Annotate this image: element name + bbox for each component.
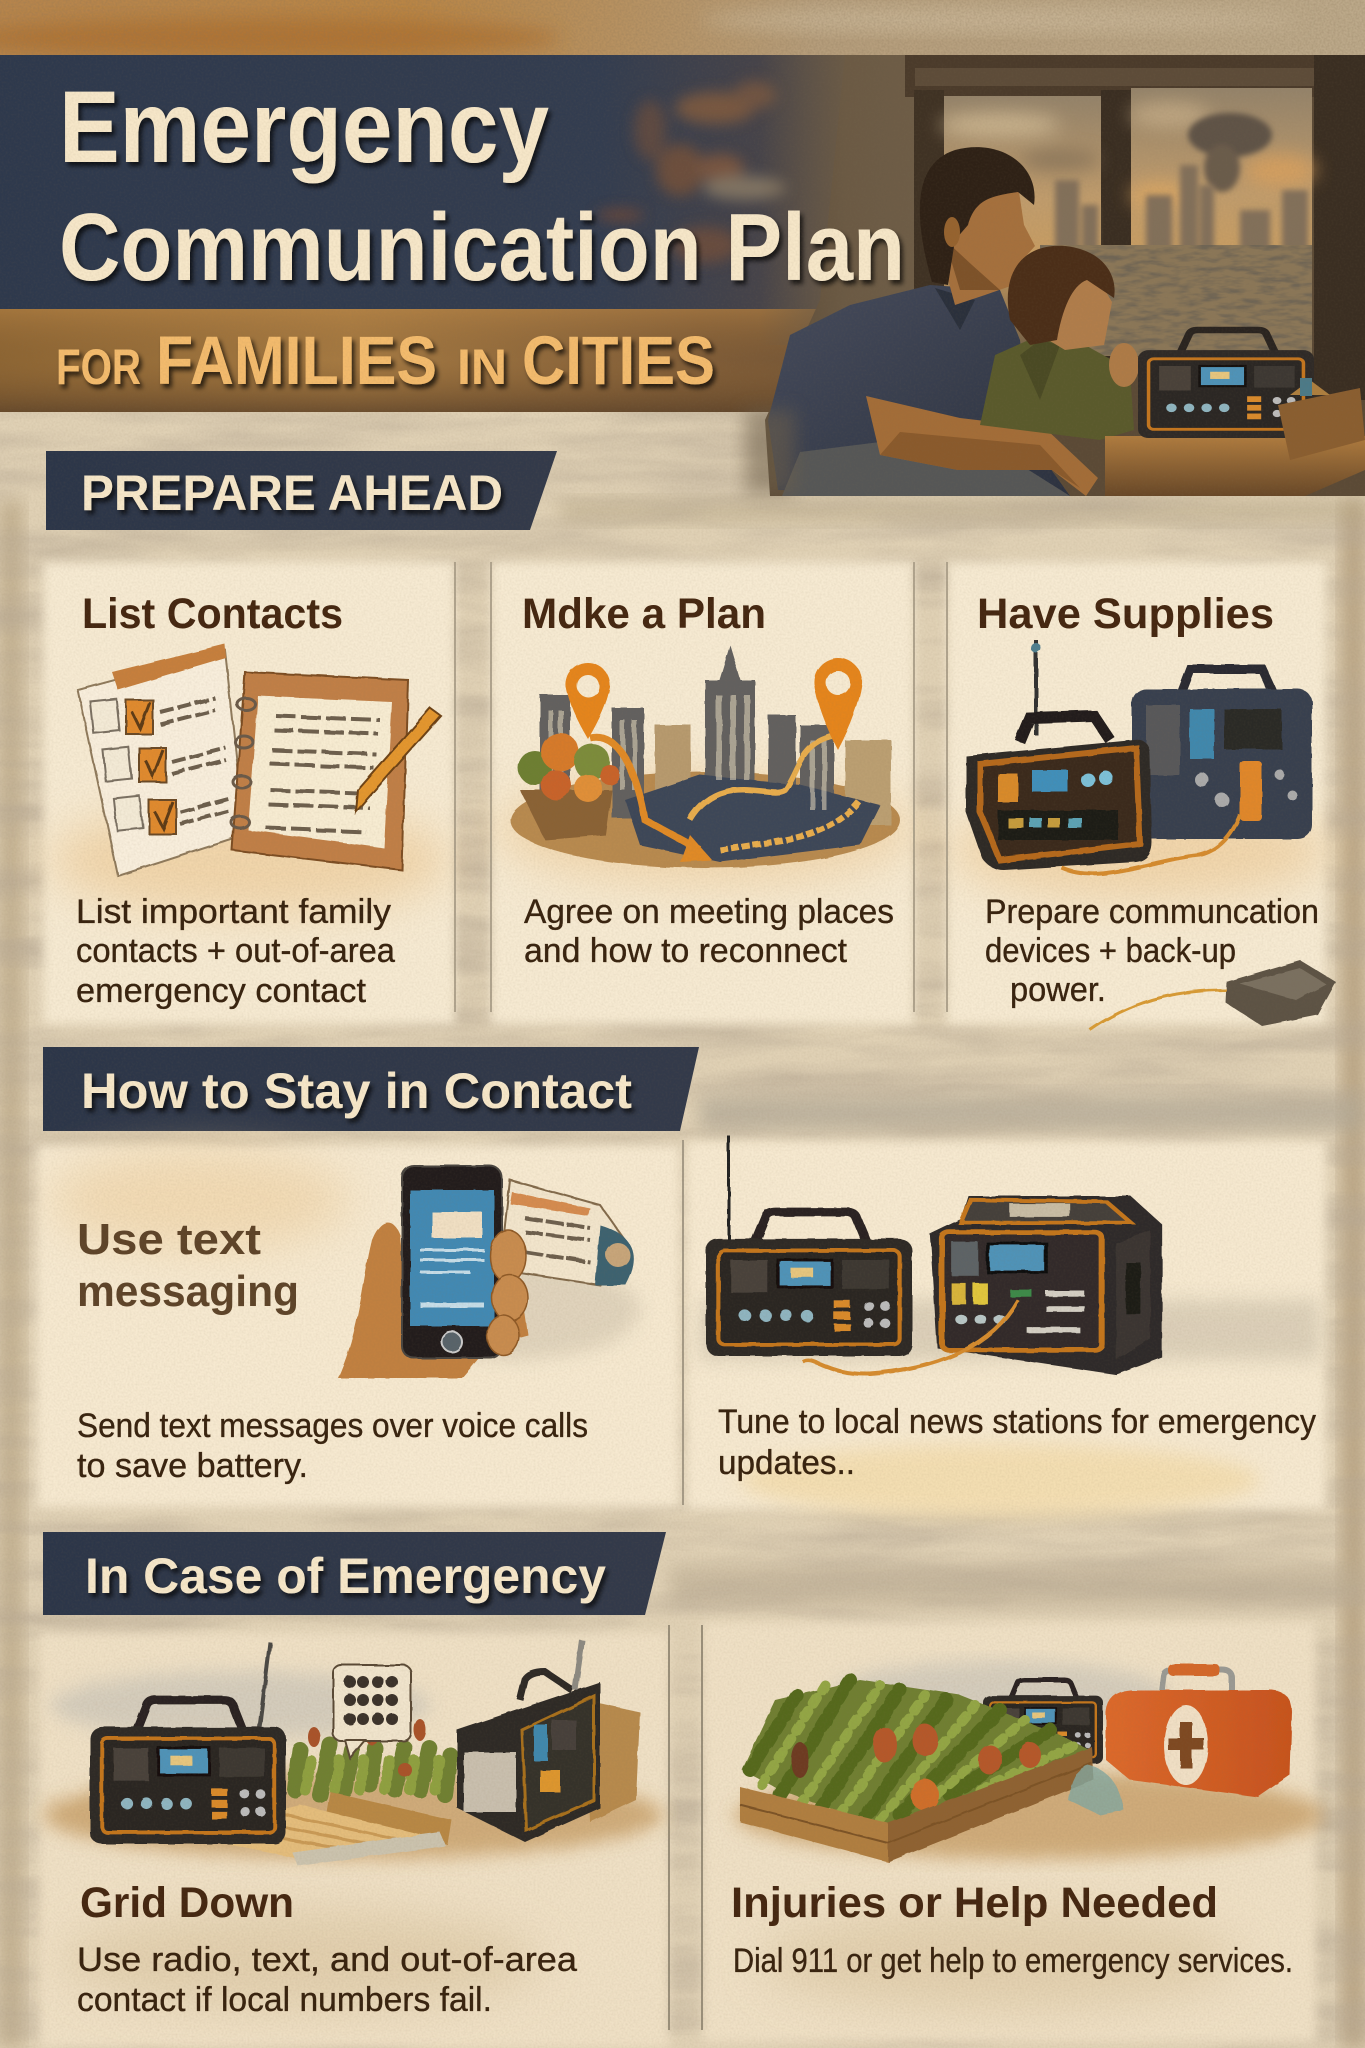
description: Use radio, text, and out-of-area [77,1941,577,1979]
icon: radios and power stations [966,640,1312,874]
smoke cloud [1188,113,1272,192]
hero header [0,0,1365,496]
small bags [1068,1765,1124,1815]
hero scene: father and son at window [760,55,1365,496]
heading: Use text [77,1215,261,1264]
description [718,1403,1316,1482]
dark smudge under figure [745,410,795,494]
description: Dial 911 or get help to emergency services. [733,1942,1293,1980]
window frame [760,55,1365,400]
panel: make a plan [491,562,915,1024]
icon: radio and power station [700,1136,1320,1375]
subtitle: FOR [56,339,141,395]
description: Agree on meeting places [524,893,894,931]
main title: Emergency [59,70,549,184]
plants [295,1745,450,1795]
faded rust clouds on band [596,81,787,263]
heading: Have Supplies [977,590,1274,638]
icon: radios, plants and speech bubble [43,1640,663,1866]
section banner: how to stay in contact: How to Stay in Contact [81,1063,632,1119]
top strip [0,0,1365,58]
description: emergency contact [76,972,367,1010]
heading: Injuries or Help Needed [731,1879,1218,1927]
panel: injuries or help needed [702,1622,1325,2042]
description: Send text messages over voice calls [77,1407,588,1445]
description [77,1407,588,1485]
father [768,147,1098,496]
rear radio [1132,669,1312,839]
panel: list contacts [43,562,455,1024]
description: updates.. [718,1444,855,1482]
bronze subtitle band [0,309,1000,412]
icon: battery pack with cord [1090,960,1336,1030]
city below window [1040,245,1312,356]
toolbox [1278,378,1365,460]
wooden crate [740,1747,1094,1862]
desk radio [1138,330,1314,438]
first aid kit [1106,1664,1292,1797]
basket of produce [518,733,620,840]
description: devices + back-up [985,932,1236,970]
panel: grid down [39,1625,669,2048]
icon: checklist and notebook [78,644,441,876]
icon: planter and first aid kit [735,1661,1325,1862]
description [985,893,1319,1009]
main title [59,70,905,301]
distant skyline [1055,165,1308,265]
description: contact if local numbers fail. [77,1981,492,2019]
section banner: in case of emergency [43,1532,666,1615]
section banner: how to stay in contact [43,1047,699,1131]
front radio [966,716,1152,870]
icon: city map with pins [510,645,900,868]
description: to save battery. [77,1447,308,1485]
description [77,1941,577,2019]
window right pane [1131,88,1312,356]
subtitle: FAMILIES [156,322,437,399]
section banner: prepare ahead [46,451,557,530]
panel: local news radio [683,1136,1326,1516]
subtitle [56,322,715,399]
subtitle: CITIES [522,322,715,399]
description: Tune to local news stations for emergency [718,1403,1316,1441]
panel: have supplies [947,562,1336,1030]
rolled mat [183,1805,446,1866]
heading: messaging [77,1267,299,1316]
sky clouds [940,103,1316,207]
map pins [566,663,610,739]
main title: Communication Plan [59,194,905,301]
description [76,893,395,1010]
navy title band [0,55,1000,310]
description: Prepare communcation [985,893,1319,931]
desk [1105,436,1365,496]
description: and how to reconnect [524,932,848,970]
raised bed [326,1792,452,1845]
section banner: prepare ahead: PREPARE AHEAD [81,465,503,521]
heading: List Contacts [82,590,343,638]
heading: Grid Down [80,1879,294,1927]
heading: Mdke a Plan [522,590,766,638]
plants [742,1680,1090,1830]
window left pane [944,96,1101,356]
description: List important family [76,893,391,931]
route [590,737,700,850]
subtitle: IN [457,339,507,395]
son [980,246,1139,440]
panel: use text messaging [37,1145,680,1507]
description: power. [1010,971,1106,1009]
section banner: in case of emergency: In Case of Emergency [85,1548,606,1604]
description: contacts + out-of-area [76,932,395,970]
icon: hand holding phone with card [338,1166,640,1378]
heading [77,1215,299,1316]
description [524,893,894,970]
small radio behind plants [983,1680,1103,1764]
